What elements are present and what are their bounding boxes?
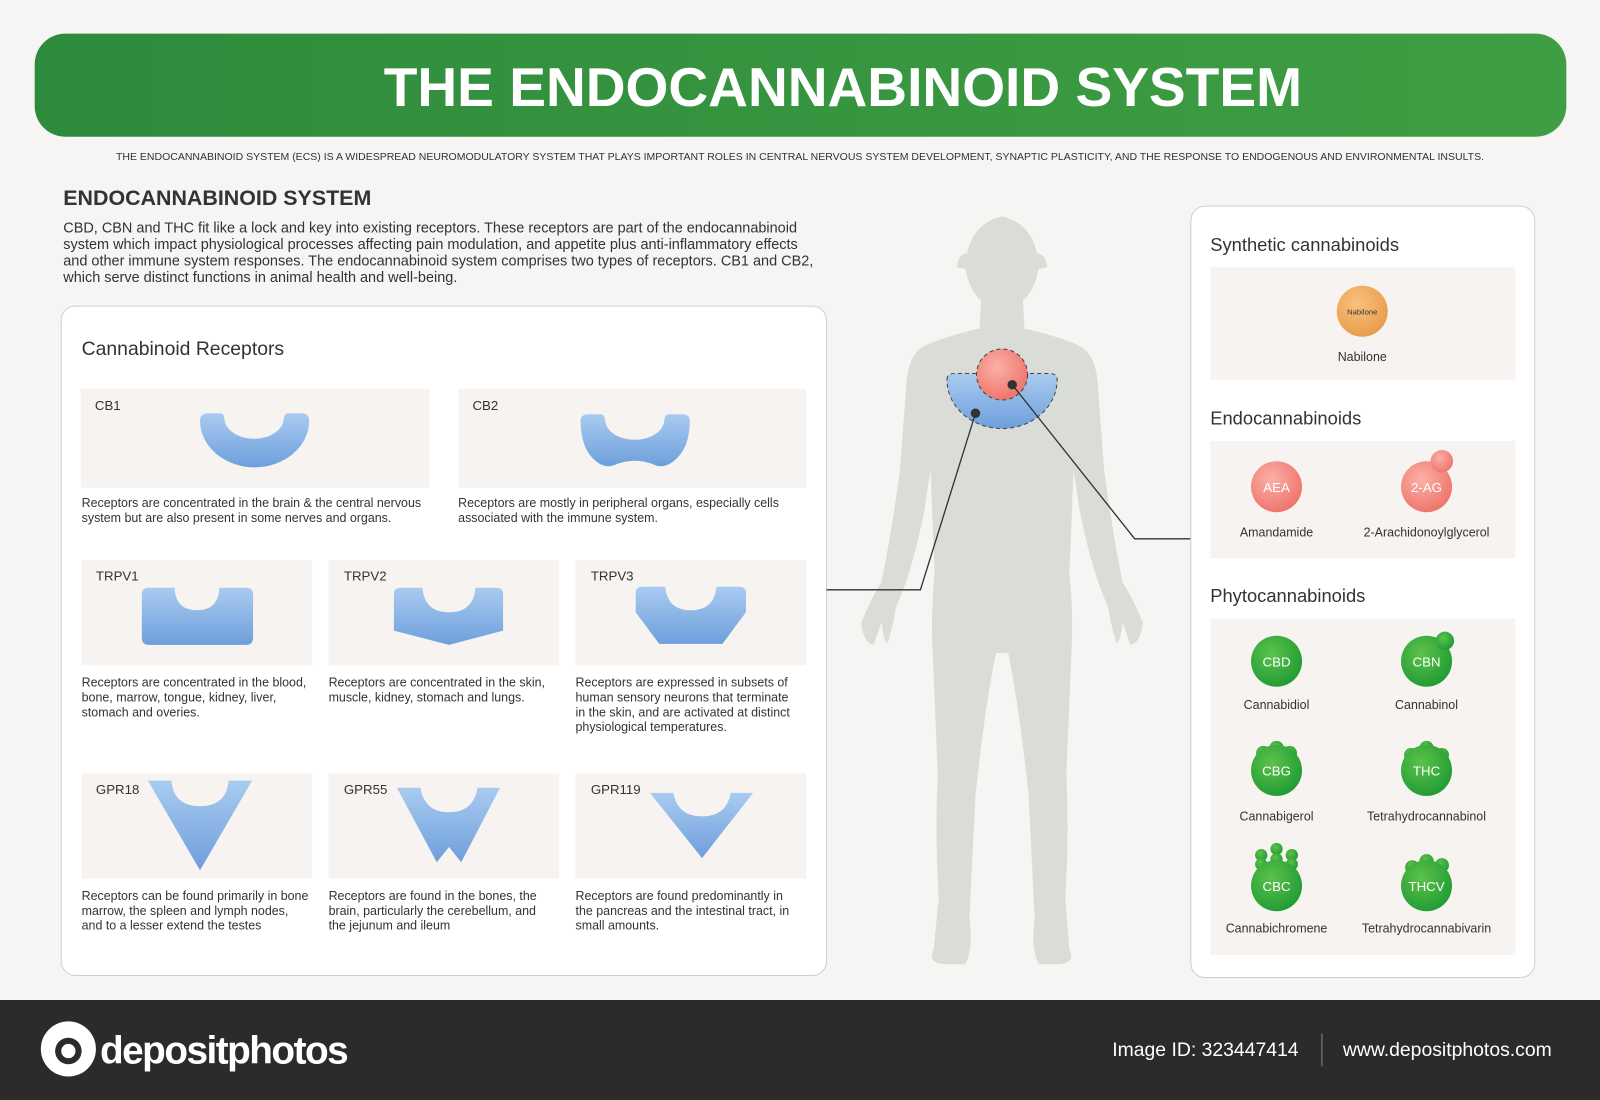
receptor: CB1: Receptors are concentrated in the brain & the central nervous [82,496,421,510]
footer bar [0,1000,1600,1100]
section heading: ENDOCANNABINOID SYSTEM [63,186,371,210]
receptor: CB2: associated with the immune system. [458,511,658,525]
human silhouette [861,216,1143,964]
receptor: GPR55: brain, particularly the cerebellum, and [329,904,536,918]
icon: camera logo [41,1021,96,1077]
receptor: CB1: CB1 [95,398,121,413]
receptor: GPR55: Receptors are found in the bones, the [329,889,537,903]
intro paragraph: CBD, CBN and THC fit like a lock and key into existing receptors. These receptors are part of the endocannabinoid [63,221,797,237]
endocannabinoids: Amandamide [1240,526,1313,540]
endocannabinoids [1210,407,1515,558]
phytocannabinoids: Cannabidiol [1244,698,1309,712]
endocannabinoids: 2-Arachidonoylglycerol [1364,526,1489,540]
intro paragraph: system which impact physiological processes affecting pain modulation, and appetite plus anti-inflammatory effects [63,237,798,253]
receptor: GPR18: and to a lesser extend the testes [82,919,261,933]
phytocannabinoids: THC [1413,764,1441,779]
receptor: GPR119 [576,773,806,933]
header banner [35,34,1566,137]
synthetic cannabinoids: Synthetic cannabinoids [1210,234,1399,255]
synthetic cannabinoids: Nabilone [1347,307,1377,316]
phytocannabinoids: THCV [1408,879,1445,894]
title: THE ENDOCANNABINOID SYSTEM [384,56,1302,118]
receptor: GPR18: marrow, the spleen and lymph nodes, [82,904,288,918]
endocannabinoids: 2-AG [1411,480,1442,495]
receptor: GPR119: small amounts. [576,919,659,933]
receptor: TRPV3: TRPV3 [591,569,634,584]
phytocannabinoids [1210,585,1515,955]
receptor: GPR55 [329,773,559,933]
intro paragraph: which serve distinct functions in animal health and well-being. [62,270,457,286]
receptor: TRPV2: TRPV2 [344,569,387,584]
receptor: TRPV1: TRPV1 [96,569,139,584]
receptor: CB1 [81,389,430,525]
endocannabinoids: Endocannabinoids [1210,407,1361,428]
receptor: TRPV1 [82,560,312,719]
receptor: TRPV2: Receptors are concentrated in the skin, [329,676,545,690]
connector lines [827,381,1191,590]
receptor: TRPV3 [576,560,806,734]
phytocannabinoids: Phytocannabinoids [1210,585,1365,606]
receptor: GPR119: the pancreas and the intestinal tract, in [576,904,789,918]
receptor: GPR18: Receptors can be found primarily in bone [82,889,308,903]
receptor: TRPV2 [329,560,559,705]
footer bar: www.depositphotos.com [1342,1039,1552,1061]
synthetic cannabinoids [1210,234,1515,380]
phytocannabinoids: Cannabinol [1395,698,1458,712]
receptor: CB1: system but are also present in some nerves and organs. [82,511,391,525]
phytocannabinoids: CBN [1413,654,1441,669]
phytocannabinoids: Cannabigerol [1240,809,1314,823]
receptor: GPR119: GPR119 [591,782,641,797]
phytocannabinoids: CBD [1263,654,1291,669]
receptor: TRPV3: Receptors are expressed in subsets of [576,676,788,690]
receptor: GPR119: Receptors are found predominantly in [576,889,783,903]
footer bar: Image ID: 323447414 [1112,1039,1299,1061]
icon: receptor with ligand in chest [947,349,1057,429]
receptor: GPR55: the jejunum and ileum [329,919,450,933]
receptor: GPR18 [82,773,312,933]
endocannabinoids: AEA [1263,480,1290,495]
receptor: TRPV3: physiological temperatures. [576,720,727,734]
receptor: TRPV1: bone, marrow, tongue, kidney, liver, [82,691,276,705]
phytocannabinoids: Cannabichromene [1226,922,1327,936]
panel: cannabinoids [1191,206,1535,978]
phytocannabinoids: CBC [1263,879,1291,894]
receptor: TRPV1: stomach and overies. [82,705,200,719]
phytocannabinoids: Tetrahydrocannabinol [1367,809,1486,823]
receptor: GPR18: GPR18 [96,782,139,797]
receptor: CB2: CB2 [472,398,498,413]
receptor: CB2: Receptors are mostly in peripheral organs, especially cells [458,496,779,510]
receptor: TRPV3: in the skin, and are activated at distinct [576,705,790,719]
panel heading: Cannabinoid Receptors [82,338,284,360]
receptor: TRPV1: Receptors are concentrated in the blood, [82,676,306,690]
intro paragraph: and other immune system responses. The endocannabinoid system comprises two types of receptors. CB1 and CB2, [63,254,813,270]
panel: cannabinoid receptors [61,306,827,976]
phytocannabinoids: CBG [1262,764,1291,779]
subtitle: THE ENDOCANNABINOID SYSTEM (ECS) IS A WIDESPREAD NEUROMODULATORY SYSTEM THAT PLAYS IMPORTANT ROLES IN CENTRAL NERVOUS SYSTEM DEVELOPMENT, SYNAPTIC PLASTICITY, AND THE RESPONSE TO ENDOGENOUS AND ENVIRONMENTAL INSULTS. [116,151,1484,163]
footer bar: depositphotos [100,1029,347,1072]
receptor: GPR55: GPR55 [344,782,387,797]
receptor: CB2 [458,389,806,525]
phytocannabinoids: Tetrahydrocannabivarin [1362,922,1491,936]
synthetic cannabinoids: Nabilone [1338,350,1387,364]
receptor: TRPV3: human sensory neurons that terminate [576,691,789,705]
receptor: TRPV2: muscle, kidney, stomach and lungs. [329,691,525,705]
